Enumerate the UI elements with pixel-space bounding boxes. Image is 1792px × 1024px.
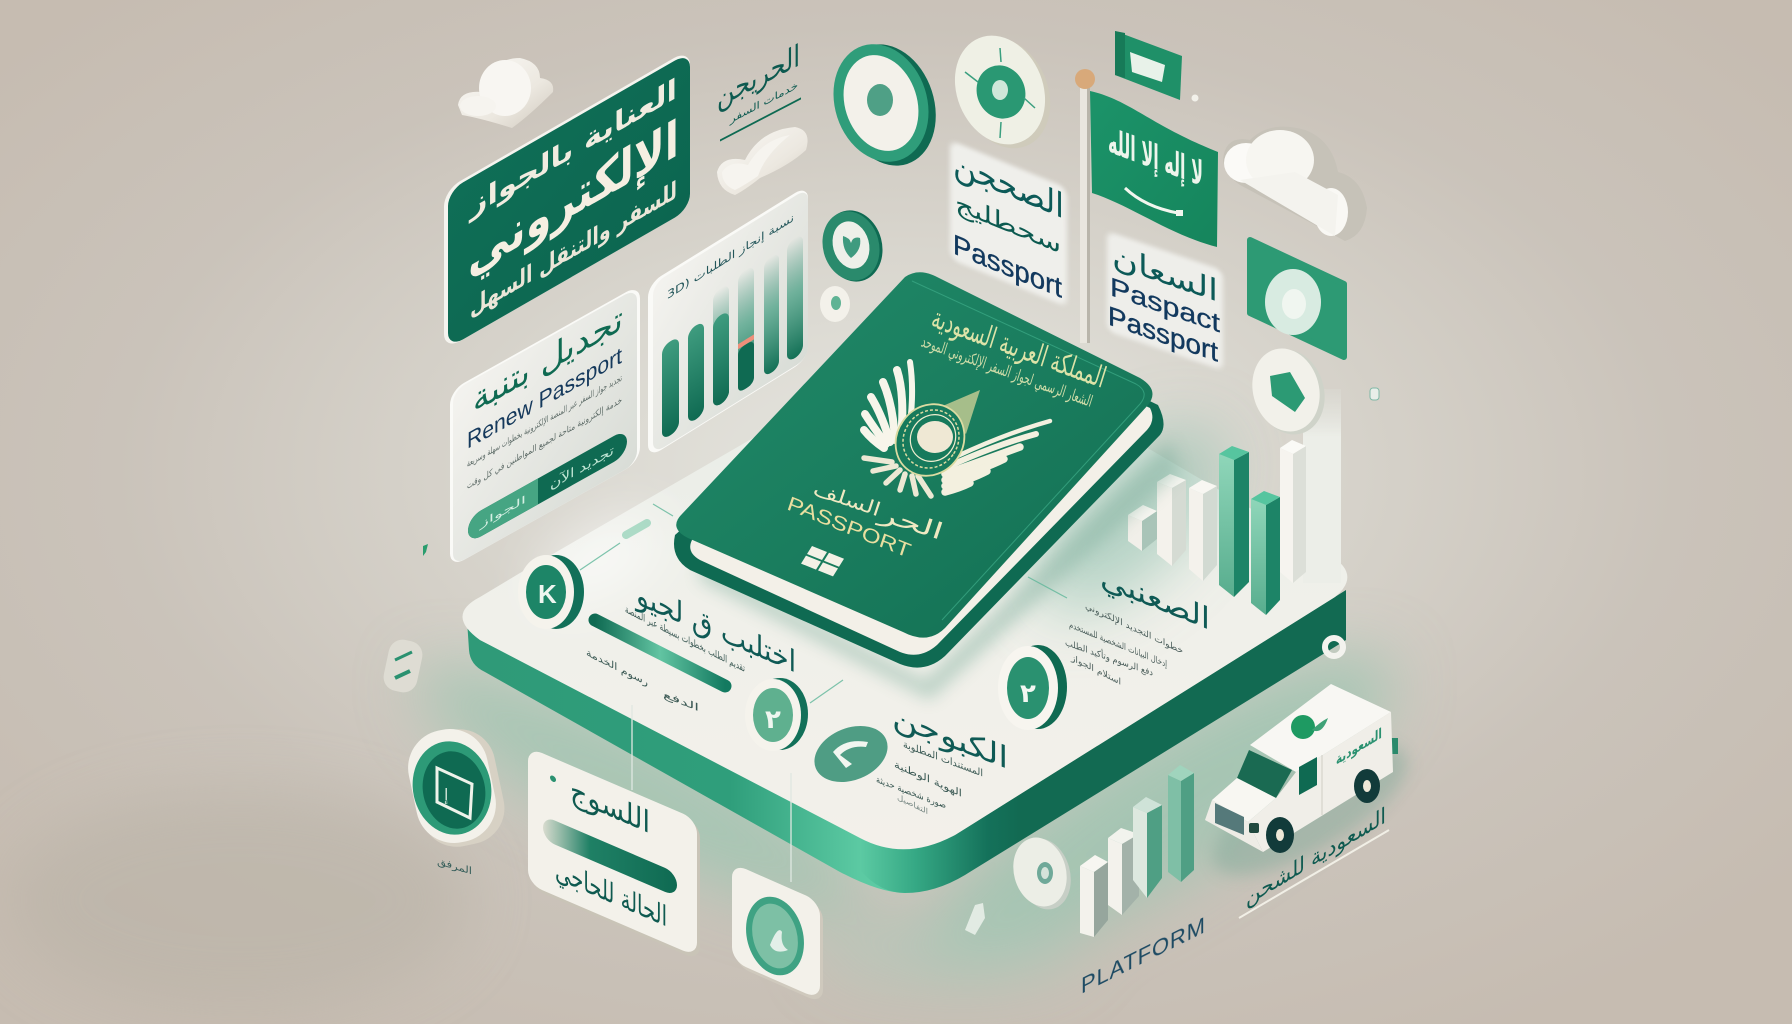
panel: bottom info card bbox=[528, 747, 700, 961]
heading: small arabic label: الحريجن bbox=[717, 37, 800, 116]
chart caption: 3D) نسبة إنجاز الطلبات bbox=[667, 211, 794, 303]
passport emblem bbox=[864, 362, 1050, 496]
panel: passport white card two bbox=[1107, 231, 1223, 370]
card arabic line: سحطليج bbox=[955, 188, 1061, 260]
passport shadow bbox=[700, 440, 1180, 700]
badge glyph bbox=[867, 84, 893, 116]
card heading: اللسوج bbox=[570, 772, 650, 841]
panel: bar columns on platform bbox=[1128, 440, 1306, 615]
text block: right platform label: إدخال البيانات الشخصية للمستخدم bbox=[1069, 619, 1167, 670]
small dot blob bbox=[820, 286, 850, 322]
van wheels bbox=[1266, 817, 1294, 853]
sub text: خطوات التجديد الإلكتروني bbox=[1085, 600, 1183, 657]
text block: right platform label: استلام الجواز bbox=[1070, 652, 1121, 688]
van front bbox=[1205, 800, 1263, 852]
card subtitle: للسفر والتنقل السهل bbox=[470, 176, 677, 323]
callout: dial K bbox=[518, 555, 584, 629]
heading: small arabic label bbox=[717, 36, 801, 142]
icon: bottom left badge: إ bbox=[444, 785, 448, 804]
passport chip bbox=[801, 546, 844, 576]
renew passport heading: Renew Passport bbox=[467, 343, 622, 455]
small text lines: خدمة إلكترونية متاحة لجميع المواطنين في كل وقت bbox=[467, 395, 622, 492]
sub text: تقديم الطلب بخطوات بسيطة عبر المنصة bbox=[625, 604, 745, 675]
arabic heading: تجديل بتنبة bbox=[473, 297, 623, 421]
passport lower arabic text: الحر bbox=[875, 500, 947, 545]
text block: left platform label bbox=[586, 576, 796, 714]
label: platform: PLATFORM bbox=[1081, 912, 1205, 999]
icon: green square card bbox=[1250, 240, 1344, 357]
platform left side face bbox=[467, 620, 905, 893]
van roof ball bbox=[1291, 715, 1315, 739]
icon: white disc bbox=[1006, 831, 1078, 916]
action button bbox=[468, 429, 627, 544]
emblem upper wing bbox=[864, 362, 912, 448]
text block: bottom platform label: التفاصيل bbox=[897, 791, 928, 816]
icon: small heart badge bbox=[815, 204, 890, 288]
passport top arabic text bbox=[919, 300, 1110, 413]
text block: right platform label bbox=[1065, 559, 1210, 688]
decorative specks bbox=[423, 388, 1379, 556]
card arabic heading: السعان bbox=[1112, 238, 1218, 310]
card footer text: الحالة للحاجي bbox=[555, 853, 667, 934]
panel: passport white card one bbox=[950, 140, 1067, 307]
icon: saudi flag bbox=[1090, 91, 1218, 247]
heading: small arabic label: خدمات السفر bbox=[729, 78, 798, 127]
platform top surface bbox=[462, 328, 1347, 849]
passport label: Passport bbox=[1108, 300, 1218, 368]
icon: cloud left bbox=[458, 58, 553, 128]
passport label: PASSPORT bbox=[785, 492, 914, 562]
heading: الكبوجن bbox=[892, 698, 1008, 777]
card mixed line: Paspact bbox=[1110, 272, 1221, 338]
text block: left platform label: رسوم الخدمة bbox=[586, 647, 648, 689]
icon: cloud right bbox=[1223, 127, 1367, 241]
emblem right wing bbox=[945, 421, 1050, 492]
platform right side face bbox=[860, 590, 1346, 893]
mint glow under platform bbox=[392, 608, 1426, 1012]
text block: bottom platform label: الهوية الوطنية bbox=[894, 758, 962, 800]
slider bar bbox=[595, 620, 725, 686]
text: arabic caption under van: السعودية للشحن bbox=[1246, 802, 1386, 912]
panel: renew passport card bbox=[450, 284, 640, 568]
thin mint pointer lines bbox=[580, 504, 1067, 703]
panel: bottom small card bbox=[732, 863, 823, 1004]
heading: الصعنبي bbox=[1100, 559, 1210, 638]
pale column behind bbox=[1303, 389, 1341, 583]
icon: left small chip bbox=[381, 637, 425, 695]
heading: اختلبب ق لجيو bbox=[634, 576, 796, 680]
card title text: العناية بالجواز bbox=[468, 72, 677, 225]
white ring marker bbox=[1325, 638, 1343, 656]
callout: oval check bbox=[806, 716, 896, 792]
mint capsule highlight bbox=[626, 523, 647, 535]
connector lines bbox=[632, 705, 791, 882]
passport top arabic text: الشعار الرسمي لجواز السفر الإلكتروني الموحد bbox=[919, 332, 1095, 412]
icon: cream circle badge bbox=[1243, 341, 1334, 442]
van logo text: السعودية bbox=[1336, 725, 1382, 769]
action button: الجواز bbox=[478, 493, 526, 532]
passport lower arabic text: السلف bbox=[811, 477, 884, 521]
emblem medallion bbox=[938, 390, 980, 434]
text block: bottom platform label bbox=[876, 698, 1008, 816]
progress bar bbox=[543, 815, 677, 897]
chart bars bbox=[662, 233, 803, 440]
callout: dial two: ٢ bbox=[765, 705, 781, 735]
flag pole bbox=[1075, 69, 1095, 343]
small text lines: تجديد جواز السفر عبر المنصة الإلكترونية بخطوات سهلة وسريعة bbox=[467, 373, 622, 470]
callout: dial three: ٢ bbox=[1020, 679, 1036, 709]
van body side bbox=[1248, 712, 1393, 852]
text block: right platform label: دفع الرسوم وتأكيد الطلب bbox=[1065, 635, 1153, 679]
card main heading: الإلكتروني bbox=[468, 108, 679, 288]
small glyph on floor bbox=[965, 903, 985, 935]
panel: isometric platform bbox=[462, 328, 1347, 893]
passport bbox=[674, 272, 1180, 700]
pages bbox=[690, 310, 1152, 655]
emblem tail bbox=[864, 458, 931, 496]
callout: dial three bbox=[998, 645, 1067, 730]
sub text: المستندات المطلوبة bbox=[903, 738, 983, 780]
front cover bbox=[676, 272, 1152, 638]
passport lower arabic text bbox=[811, 477, 947, 545]
panel: bar chart card bbox=[648, 185, 808, 458]
chart: bottom bar columns bbox=[1080, 765, 1194, 937]
icon: delivery van bbox=[1195, 684, 1425, 900]
icon: large green ring badge bbox=[819, 32, 951, 178]
soft mint shadow beside passport bbox=[527, 396, 1254, 644]
callout: dial two bbox=[745, 678, 808, 751]
icon: cloud middle bbox=[717, 127, 808, 195]
van windshield bbox=[1237, 750, 1292, 798]
van grille bbox=[1215, 803, 1244, 835]
icon: cream dial badge bbox=[939, 22, 1066, 162]
action button: تجديد الآن bbox=[550, 443, 614, 493]
panel: green title card bbox=[444, 49, 690, 350]
text block: left platform label: الدفع bbox=[663, 688, 699, 714]
van hood bbox=[1212, 778, 1276, 822]
passport top arabic text: المملكة العربية السعودية bbox=[928, 301, 1110, 395]
text block: bottom platform label: صورة شخصية حديثة bbox=[876, 774, 946, 812]
van roof bbox=[1250, 684, 1391, 772]
icon: saudi flag: لا إله إلا الله bbox=[1108, 121, 1203, 196]
icon: bottom left badge bbox=[401, 722, 511, 853]
back cover bbox=[674, 300, 1164, 668]
card arabic heading: الصحجن bbox=[953, 142, 1064, 227]
callout: dial K: K bbox=[538, 579, 557, 609]
small caption under badge: المرفق bbox=[437, 856, 472, 877]
icon: small flag bbox=[1115, 31, 1182, 100]
passport label: Passport bbox=[953, 229, 1062, 305]
van side window bbox=[1299, 757, 1317, 795]
van rear fitting bbox=[1390, 738, 1398, 754]
darker corner tint bbox=[10, 790, 470, 1010]
